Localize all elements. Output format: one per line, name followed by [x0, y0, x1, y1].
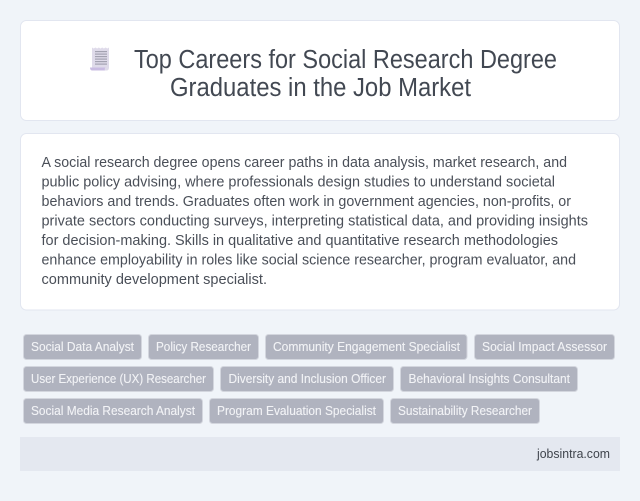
text block: description: private sectors conducting surveys, interpreting statistical data, and providing insights [42, 212, 588, 230]
tag: Social Media Research Analyst: Social Media Research Analyst [31, 403, 195, 418]
text block: description: public policy advising, where professionals design studies to understand societal [42, 174, 555, 190]
tag: User Experience (UX) Researcher [24, 366, 214, 392]
tag: Social Media Research Analyst [24, 398, 202, 424]
panel: header [20, 20, 620, 120]
tag: Program Evaluation Specialist: Program Evaluation Specialist [217, 403, 376, 418]
career tags [24, 334, 614, 424]
tag: Behavioral Insights Consultant [400, 366, 578, 392]
tag: Diversity and Inclusion Officer [220, 366, 394, 392]
icon: document scroll [90, 48, 109, 70]
tag: Sustainability Researcher: Sustainability Researcher [398, 403, 533, 418]
text block: description: A social research degree opens career paths in data analysis, market research, and [42, 154, 567, 171]
panel: description [20, 134, 620, 310]
tag: Sustainability Researcher [390, 398, 540, 424]
text block: description: enhance employability in roles like social science researcher, program evaluator, and [42, 252, 576, 268]
tag: Social Impact Assessor: Social Impact Assessor [482, 339, 608, 354]
footer [20, 437, 620, 471]
tag: Social Data Analyst [24, 334, 142, 360]
text block: description: community development specialist. [42, 271, 267, 288]
text block: description [42, 154, 588, 288]
tag: Community Engagement Specialist [266, 334, 467, 360]
tag: Policy Researcher [148, 334, 258, 360]
title [134, 46, 557, 102]
tag: Behavioral Insights Consultant: Behavioral Insights Consultant [408, 371, 570, 386]
tag: Diversity and Inclusion Officer: Diversity and Inclusion Officer [228, 371, 387, 386]
text block: description: for decision-making. Skills in qualitative and quantitative research methodologies [42, 232, 558, 249]
tag: Policy Researcher: Policy Researcher [156, 339, 252, 354]
tag: Community Engagement Specialist: Community Engagement Specialist [273, 339, 460, 354]
tag: User Experience (UX) Researcher: User Experience (UX) Researcher [31, 371, 207, 386]
tag: Social Data Analyst: Social Data Analyst [31, 339, 134, 354]
tag: Program Evaluation Specialist [210, 398, 384, 424]
title: Top Careers for Social Research Degree [134, 46, 557, 74]
tag: Social Impact Assessor [474, 334, 614, 360]
title: Graduates in the Job Market [170, 74, 471, 102]
text block: description: behaviors and trends. Graduates often work in government agencies, non-profits, or [42, 193, 571, 210]
footer source text: jobsintra.com [536, 446, 610, 461]
